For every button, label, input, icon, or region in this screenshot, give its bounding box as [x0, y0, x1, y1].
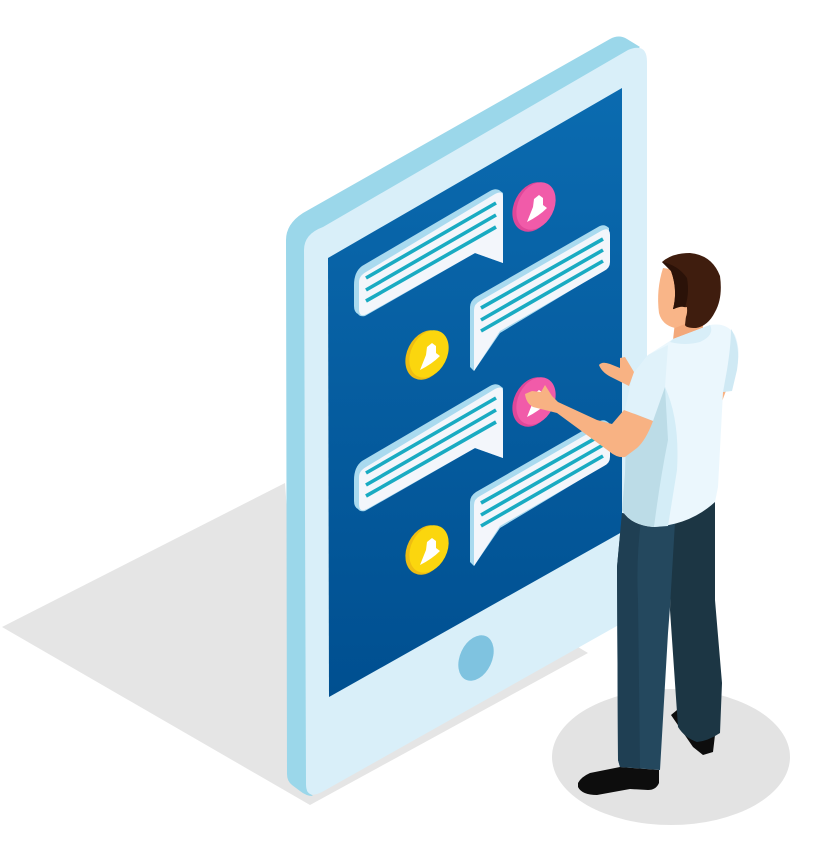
- ear: [674, 307, 687, 323]
- ground shadow under person: [552, 689, 790, 825]
- chat bubble 1: [354, 189, 503, 316]
- hair shadow: [662, 262, 688, 310]
- near arm and hand: [525, 385, 653, 457]
- back shoe: [671, 710, 715, 755]
- raised hand: [599, 357, 634, 386]
- person standing at tablet: [525, 253, 739, 795]
- tablet side edge: [286, 36, 640, 796]
- tablet screen: [328, 88, 622, 697]
- icon: yellow user badge 1: [397, 323, 456, 387]
- icon: pink user badge 2: [504, 370, 563, 434]
- shirt shaded side: [622, 387, 670, 527]
- trouser shading: [617, 513, 641, 768]
- front trouser leg: [617, 513, 675, 770]
- icon: yellow user badge 2: [397, 518, 456, 582]
- icon: pink user badge 1: [504, 175, 563, 239]
- shirt right sleeve shade: [723, 329, 738, 392]
- front shoe: [578, 767, 659, 795]
- home button: [451, 629, 501, 687]
- tablet floor shadow: [2, 483, 588, 805]
- shirt: [622, 324, 739, 527]
- chat bubble 4: [470, 420, 610, 566]
- collar shade: [670, 325, 711, 344]
- chat bubble 3: [354, 384, 503, 511]
- giant tablet: [286, 36, 647, 796]
- shirt sleeve: [625, 345, 668, 421]
- neck: [673, 322, 703, 342]
- tablet front face: [304, 48, 647, 795]
- back trouser leg: [670, 500, 722, 742]
- hair: [662, 253, 721, 328]
- face: [658, 268, 692, 328]
- chat bubble 2: [470, 225, 610, 371]
- far arm: [714, 388, 727, 415]
